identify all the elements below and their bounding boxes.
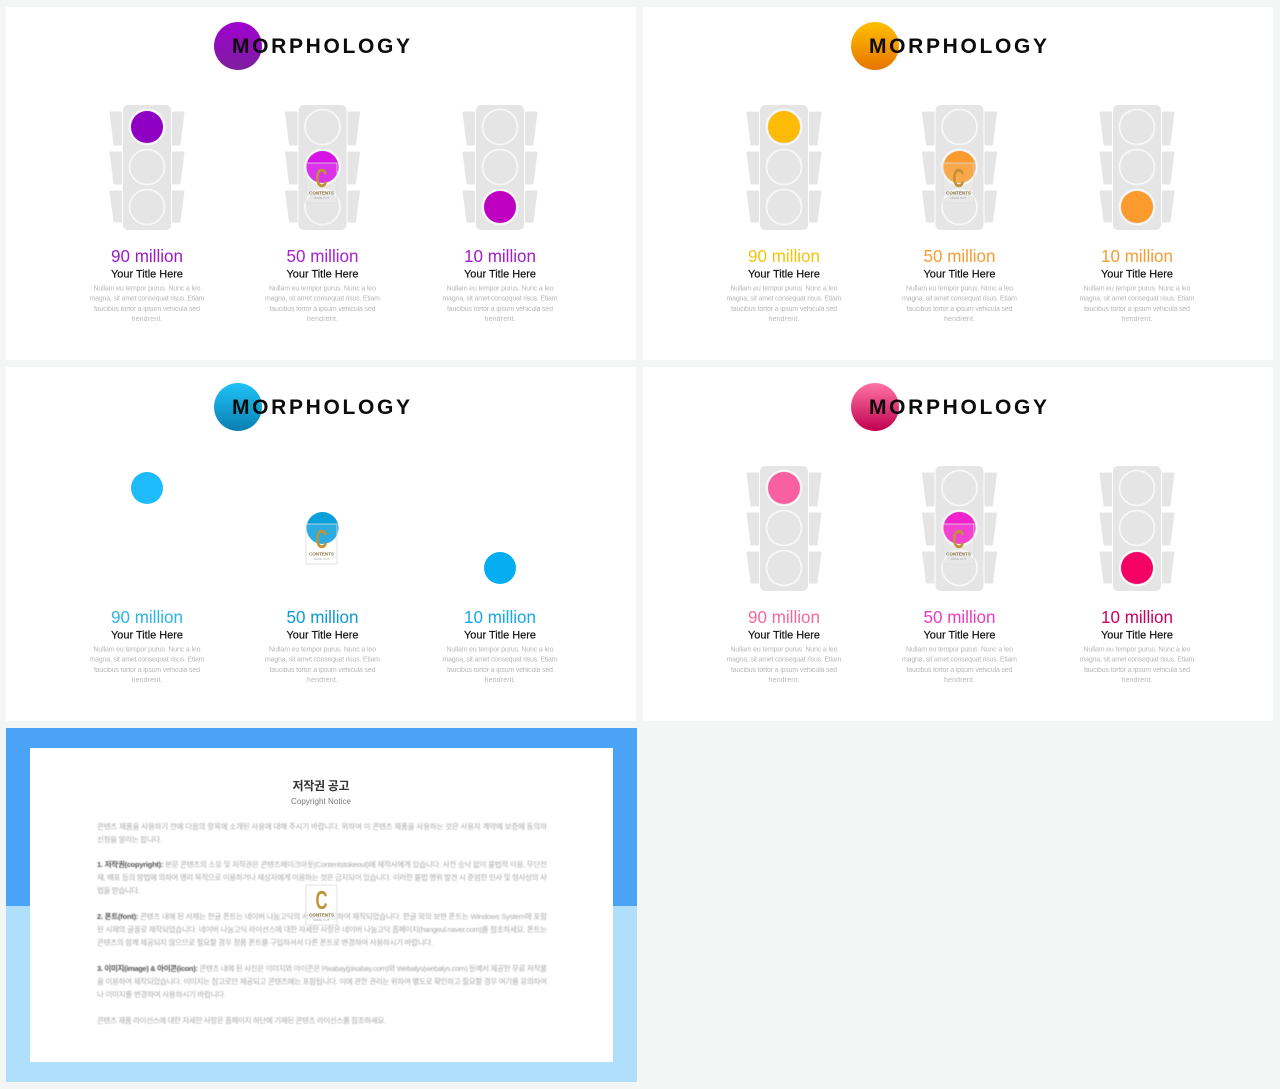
column: 90 million: faucibus tortor a ipsum vehicula sed [731,667,837,674]
heading: yellow circle and title: MORPHOLOGY [869,35,1047,58]
column: 10 million [442,552,558,684]
column: 50 million: 50 million [924,246,996,266]
heading: blue circle and title [214,383,410,431]
column: 90 million: hendrerit. [768,677,800,684]
column: 10 million: Nullam eu tempor purus. Nunc a leo [446,646,554,654]
column: 10 million: Your Title Here [1101,630,1173,642]
column: 50 million: Nullam eu tempor purus. Nunc a leo [906,646,1013,654]
panel: morphology yellow [643,7,1273,360]
column: 10 million: faucibus tortor a ipsum vehicula sed [447,667,553,674]
watermark logo: CONTENTS [309,190,334,196]
column: 50 million: Nullam eu tempor purus. Nunc a leo [269,646,376,654]
watermark logo [943,524,974,564]
column: 10 million [1080,105,1195,323]
column: 10 million: hendrerit. [484,677,516,684]
column: 50 million: magna, sit amet consequat risus. Etiam [902,656,1017,664]
column: 10 million: magna, sit amet consequat risus. Etiam [1080,656,1195,664]
column: 10 million: magna, sit amet consequat risus. Etiam [442,296,558,302]
panel: morphology purple [6,7,636,360]
section 2: font: 2. 폰트(font): 콘텐츠 내에 된 서체는 한글 폰트는 네이버 나눔고딕의 서체를 제공하여 제작되었습니다. 한글 외의 보편 폰트는 Windows System에 포함 [97,911,547,921]
column: 50 million: faucibus tortor a ipsum vehicula sed [906,667,1013,674]
watermark logo: C [316,163,328,193]
watermark logo: CONTENTS [309,912,334,918]
column: 10 million: Your Title Here [464,630,536,642]
column: 90 million: Your Title Here [111,630,183,642]
column: 50 million [902,105,1017,323]
section 1: copyright [97,859,547,895]
column: 50 million: Nullam eu tempor purus. Nunc a leo [269,286,376,292]
column: 10 million: Your Title Here [464,268,536,280]
column: 90 million: magna, sit amet consequat risus. Etiam [90,656,205,664]
column: 50 million: hendrerit. [307,677,338,684]
column: 10 million [442,105,558,323]
column: 50 million: hendrerit. [944,677,975,684]
watermark logo: C [316,524,328,554]
column: 50 million [265,105,380,323]
watermark logo: C [316,885,328,915]
watermark logo [306,524,337,564]
column: 50 million: Your Title Here [924,268,996,280]
panel: morphology blue [6,367,636,721]
column: 90 million [90,105,205,323]
column: 50 million: Your Title Here [924,630,996,642]
column: 90 million: Nullam eu tempor purus. Nunc a leo [730,286,838,292]
copyright intro: 신청을 알리는 합니다. [97,835,162,844]
column: 50 million: faucibus tortor a ipsum vehicula sed [270,667,376,674]
watermark logo: CONTENTS [946,190,971,196]
column: 10 million: magna, sit amet consequat risus. Etiam [442,656,558,664]
column: 10 million: hendrerit. [1122,316,1153,323]
copyright intro: 콘텐츠 제품을 사용하기 전에 다음의 항목에 소개된 사용에 대해 주시기 바랍니다. 위하여 이 콘텐츠 제품을 사용하는 것은 사용자 계약에 보증에 동의하 [97,821,547,831]
copyright title: Copyright Notice [291,797,352,806]
heading: pink circle and title [851,383,1047,431]
heading: yellow circle and title [851,22,1047,70]
column: 50 million: 50 million [924,607,996,627]
column: 10 million: 10 million [1101,246,1173,266]
column: 10 million: 10 million [464,246,536,266]
column: 90 million: Your Title Here [748,268,820,280]
column: 10 million: Nullam eu tempor purus. Nunc a leo [446,286,554,292]
column: 10 million: faucibus tortor a ipsum vehicula sed [1084,667,1190,674]
column: 50 million: Your Title Here [286,630,358,642]
copyright title [291,778,352,806]
column: 90 million: faucibus tortor a ipsum vehicula sed [731,306,837,313]
column: 10 million: 10 million [464,607,536,627]
column: 90 million [726,466,842,684]
section 2: font [97,911,547,947]
column: 90 million: magna, sit amet consequat risus. Etiam [726,656,842,664]
column: 50 million [902,466,1017,684]
section 1: copyright: 법을 받습니다. [97,885,140,895]
column: 90 million: Nullam eu tempor purus. Nunc a leo [730,646,838,654]
column: 50 million: hendrerit. [307,316,338,323]
column: 90 million: magna, sit amet consequat risus. Etiam [726,296,842,302]
column: 10 million: Nullam eu tempor purus. Nunc a leo [1084,646,1191,654]
column: 90 million: magna, sit amet consequat risus. Etiam [90,296,205,302]
column: 90 million: hendrerit. [132,316,163,323]
license note: 콘텐츠 제품 라이선스에 대한 자세한 사항은 홈페이지 하단에 기재된 콘텐츠 라이선스를 참조하세요. [97,1015,386,1025]
watermark logo: MAKE OUT [314,196,329,200]
column: 10 million: faucibus tortor a ipsum vehicula sed [1084,306,1190,313]
watermark logo: MAKE OUT [951,196,966,200]
column: 50 million: faucibus tortor a ipsum vehicula sed [270,306,376,313]
column: 10 million: Nullam eu tempor purus. Nunc a leo [1084,286,1191,292]
column: 50 million [265,512,380,684]
watermark logo: CONTENTS [946,552,971,556]
column: 90 million [90,472,205,684]
column: 90 million: 90 million [111,246,183,266]
column: 50 million: Your Title Here [286,268,358,280]
heading: purple circle and title [214,22,410,70]
column: 90 million [726,105,842,323]
column: 10 million: Your Title Here [1101,268,1173,280]
watermark logo: C [952,524,965,554]
section 3: image and icon [97,963,547,999]
section 2: font: 콘텐츠의 함께 제공되지 않으므로 필요할 경우 정품 폰트를 구입하셔서 다른 폰트로 변경하여 사용하시기 바랍니다. [97,937,433,947]
column: 10 million: hendrerit. [484,316,516,323]
column: 90 million: faucibus tortor a ipsum vehicula sed [94,667,200,674]
section 3: image and icon: 나 이미지를 변경하여 사용하시기 바랍니다. [97,989,226,999]
column: 90 million: 90 million [748,246,820,266]
column: 10 million: faucibus tortor a ipsum vehicula sed [447,306,553,313]
heading: purple circle and title: MORPHOLOGY [232,35,410,58]
column: 50 million: magna, sit amet consequat risus. Etiam [265,296,380,302]
watermark logo: C [952,163,965,193]
column: 90 million: hendrerit. [132,677,163,684]
column: 90 million: 90 million [748,607,820,627]
watermark logo: MAKE OUT [314,557,329,561]
column: 50 million: 50 million [286,246,358,266]
column: 90 million: Your Title Here [111,268,183,280]
column: 10 million: 10 million [1101,607,1173,627]
column: 50 million: faucibus tortor a ipsum vehicula sed [906,306,1013,313]
section 3: image and icon: 3. 이미지(image) & 아이콘(icon): 콘텐츠 내에 된 사진은 이미지와 아이콘은 Pixabay(pixabay.com)와 Webalys(webalys.com) 등에서 제공한 무료 저작물 [97,963,547,973]
watermark logo: MAKE OUT [314,918,329,922]
column: 90 million: faucibus tortor a ipsum vehicula sed [94,306,200,313]
heading: blue circle and title: MORPHOLOGY [232,396,410,419]
column: 50 million: Nullam eu tempor purus. Nunc a leo [906,286,1013,292]
column: 90 million: hendrerit. [768,316,800,323]
watermark logo [306,163,337,203]
copyright title: 저작권 공고 [292,778,350,793]
column: 50 million: magna, sit amet consequat risus. Etiam [265,656,380,664]
heading: pink circle and title: MORPHOLOGY [869,396,1047,419]
column: 50 million: hendrerit. [944,316,975,323]
section 1: copyright: 1. 저작권(copyright): 본문 콘텐츠의 소유 및 저작권은 콘텐츠메이크아웃(Contentstokeout)에 제작사에게 있습니다. 사전 승낙 없이 불법적 이용, 무단전 [97,859,547,869]
copyright intro [97,821,547,844]
column: 10 million [1080,466,1195,684]
panel: copyright notice [6,728,637,1082]
section 3: image and icon: 을 이용하여 제작되었습니다. 이미지는 참고로만 제공되고 콘텐츠에는 포함됩니다. 이에 관한 권리는 위하여 별도로 확인하고 필요할 경우 여기를 유의하여 [97,976,547,986]
watermark logo [306,885,337,925]
column: 90 million: Your Title Here [748,630,820,642]
section 2: font: 된 시제의 글꼴로 제작되었습니다. 네이버 나눔고딕 라이선스에 대한 자세한 사항은 네이버 나눔고딕 홈페이지(hangeul.naver.com)를 참조하세요. 폰트는 [97,924,547,934]
column: 50 million: 50 million [286,607,358,627]
column: 90 million: Nullam eu tempor purus. Nunc a leo [94,286,201,292]
watermark logo: CONTENTS [309,552,334,556]
watermark logo: MAKE OUT [951,557,966,561]
watermark logo [943,163,974,203]
column: 50 million: magna, sit amet consequat risus. Etiam [902,296,1017,302]
column: 10 million: magna, sit amet consequat risus. Etiam [1080,296,1195,302]
column: 90 million: 90 million [111,607,183,627]
column: 90 million: Nullam eu tempor purus. Nunc a leo [94,646,201,654]
panel: morphology pink [643,367,1273,721]
column: 10 million: hendrerit. [1122,677,1153,684]
section 1: copyright: 재, 배포 등의 방법에 의하여 영리 목적으로 이용하거나 제삼자에게 이용하는 것은 금지되어 있습니다. 이러한 불법 행위 발견 시 준엄한 민사 및 형사상의 사 [97,872,547,882]
